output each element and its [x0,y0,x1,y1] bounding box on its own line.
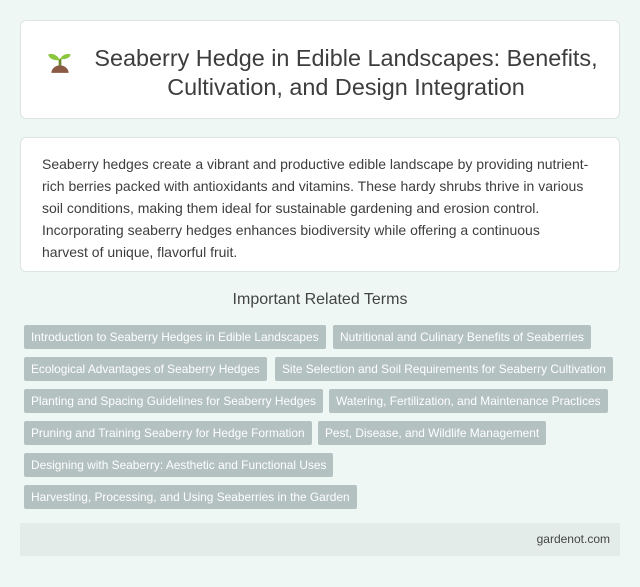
title: Seaberry Hedge in Edible Landscapes: Benefits, Cultivation, and Design Integration [94,45,598,100]
tag: Nutritional and Culinary Benefits of Seaberries [340,330,584,344]
tag [333,325,591,349]
tag: Site Selection and Soil Requirements for Seaberry Cultivation [282,362,606,376]
tag [329,389,608,413]
tag [24,357,267,381]
title card [20,20,620,119]
tag: Ecological Advantages of Seaberry Hedges [31,362,260,376]
description text: Seaberry hedges create a vibrant and productive edible landscape by providing nutrient- [42,156,588,172]
description text: harvest of unique, flavorful fruit. [42,244,237,260]
section heading: Important Related Terms [233,291,407,308]
tag: Pest, Disease, and Wildlife Management [325,426,539,440]
description text: Incorporating seaberry hedges enhances biodiversity while offering a continuous [42,222,540,238]
terms tags [24,325,613,509]
tag: Planting and Spacing Guidelines for Seaberry Hedges [31,394,316,408]
tag [24,325,326,349]
tag [318,421,546,445]
tag: Harvesting, Processing, and Using Seaberries in the Garden [31,490,350,504]
tag [24,389,323,413]
tag [24,485,357,509]
tag [24,453,333,477]
description text [42,156,588,260]
tag: Pruning and Training Seaberry for Hedge Formation [31,426,305,440]
description text: soil conditions, making them ideal for sustainable gardening and erosion control. [42,200,539,216]
description text: rich berries packed with antioxidants and vitamins. These hardy shrubs thrive in various [42,178,583,194]
tag [24,421,312,445]
footer source: gardenot.com [537,532,610,546]
tag: Watering, Fertilization, and Maintenance Practices [336,394,601,408]
tag: Designing with Seaberry: Aesthetic and Functional Uses [31,458,326,472]
footer [20,523,620,556]
icon: seedling [48,54,71,73]
tag [275,357,613,381]
tag: Introduction to Seaberry Hedges in Edible Landscapes [31,330,319,344]
description card [20,137,620,272]
